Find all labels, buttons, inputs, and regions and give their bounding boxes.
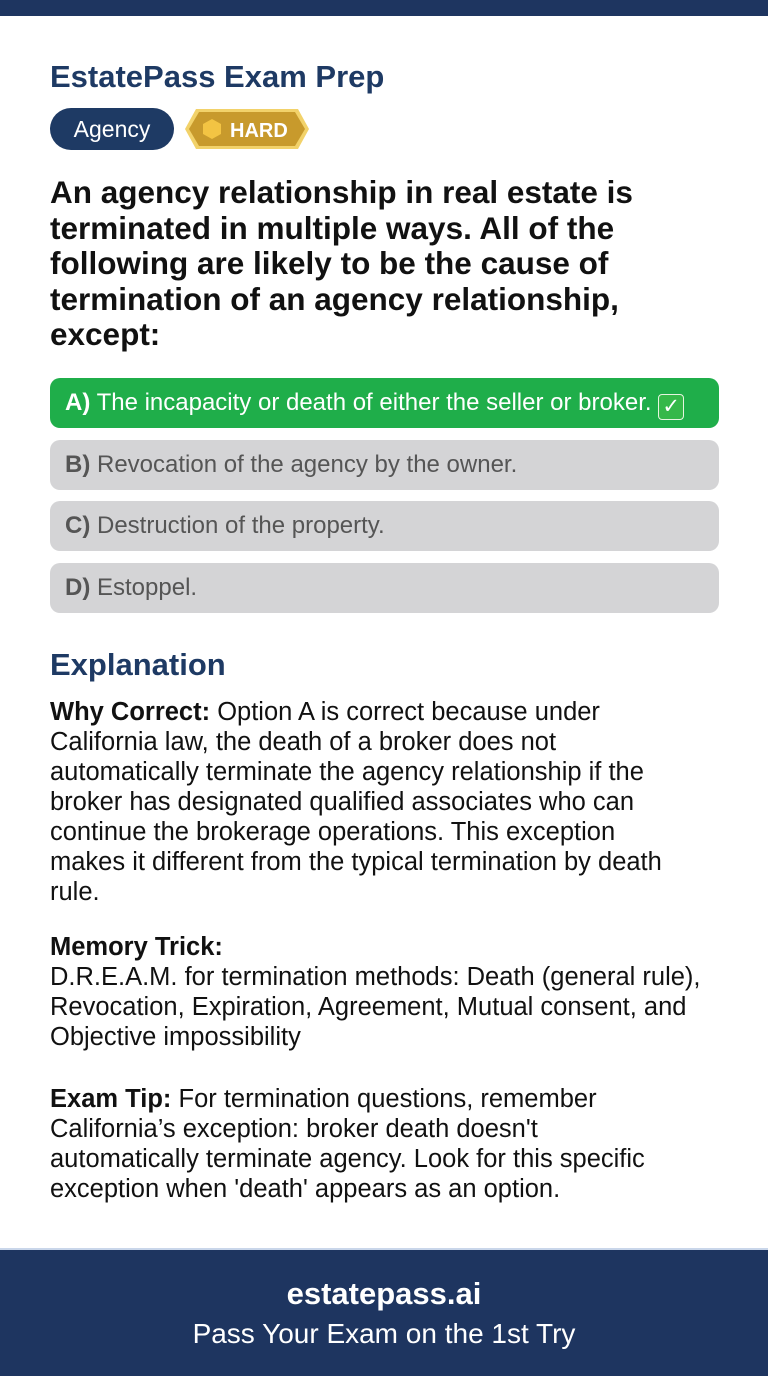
option B xyxy=(50,440,719,490)
memory trick: D.R.E.A.M. for termination methods: Death (general rule), xyxy=(50,963,701,991)
exam tip: exception when 'death' appears as an option. xyxy=(50,1175,560,1203)
option A: A) The incapacity or death of either the seller or broker. xyxy=(65,389,652,416)
why correct: rule. xyxy=(50,878,100,906)
question: except: xyxy=(50,316,160,352)
option C: C) Destruction of the property. xyxy=(65,512,385,539)
memory trick: Memory Trick: xyxy=(50,933,223,961)
why correct: continue the brokerage operations. This exception xyxy=(50,818,615,846)
badges xyxy=(50,108,309,150)
question: An agency relationship in real estate is xyxy=(50,174,633,210)
why correct: automatically terminate the agency relationship if the xyxy=(50,758,644,786)
badge: hard xyxy=(185,109,309,149)
question: termination of an agency relationship, xyxy=(50,280,619,316)
badge: agency xyxy=(50,108,174,150)
exam tip: California’s exception: broker death doesn't xyxy=(50,1115,538,1143)
option A: ✓ xyxy=(662,395,680,418)
memory trick: Objective impossibility xyxy=(50,1023,301,1051)
why correct: California law, the death of a broker does not xyxy=(50,728,556,756)
why correct: broker has designated qualified associates who can xyxy=(50,788,634,816)
badge: hard: HARD xyxy=(230,120,288,142)
option C xyxy=(50,501,719,551)
why correct xyxy=(50,698,662,906)
badge: agency: Agency xyxy=(74,116,150,142)
exam tip: automatically terminate agency. Look for this specific xyxy=(50,1145,645,1173)
footer xyxy=(0,1248,768,1376)
question xyxy=(50,174,633,352)
question: following are likely to be the cause of xyxy=(50,245,608,281)
memory trick: Revocation, Expiration, Agreement, Mutual consent, and xyxy=(50,993,686,1021)
why correct: Why Correct: Option A is correct because under xyxy=(50,698,600,726)
question: terminated in multiple ways. All of the xyxy=(50,210,614,246)
explanation heading: Explanation xyxy=(50,647,226,682)
footer: estatepass.ai xyxy=(287,1276,481,1311)
footer: Pass Your Exam on the 1st Try xyxy=(193,1318,575,1349)
option B: B) Revocation of the agency by the owner. xyxy=(65,451,517,478)
memory trick xyxy=(50,933,701,1051)
option D xyxy=(50,563,719,613)
title: EstatePass Exam Prep xyxy=(50,59,384,94)
exam tip: Exam Tip: For termination questions, remember xyxy=(50,1085,597,1113)
option D: D) Estoppel. xyxy=(65,574,197,601)
exam tip xyxy=(50,1085,645,1203)
why correct: makes it different from the typical termination by death xyxy=(50,848,662,876)
option A xyxy=(50,378,719,428)
